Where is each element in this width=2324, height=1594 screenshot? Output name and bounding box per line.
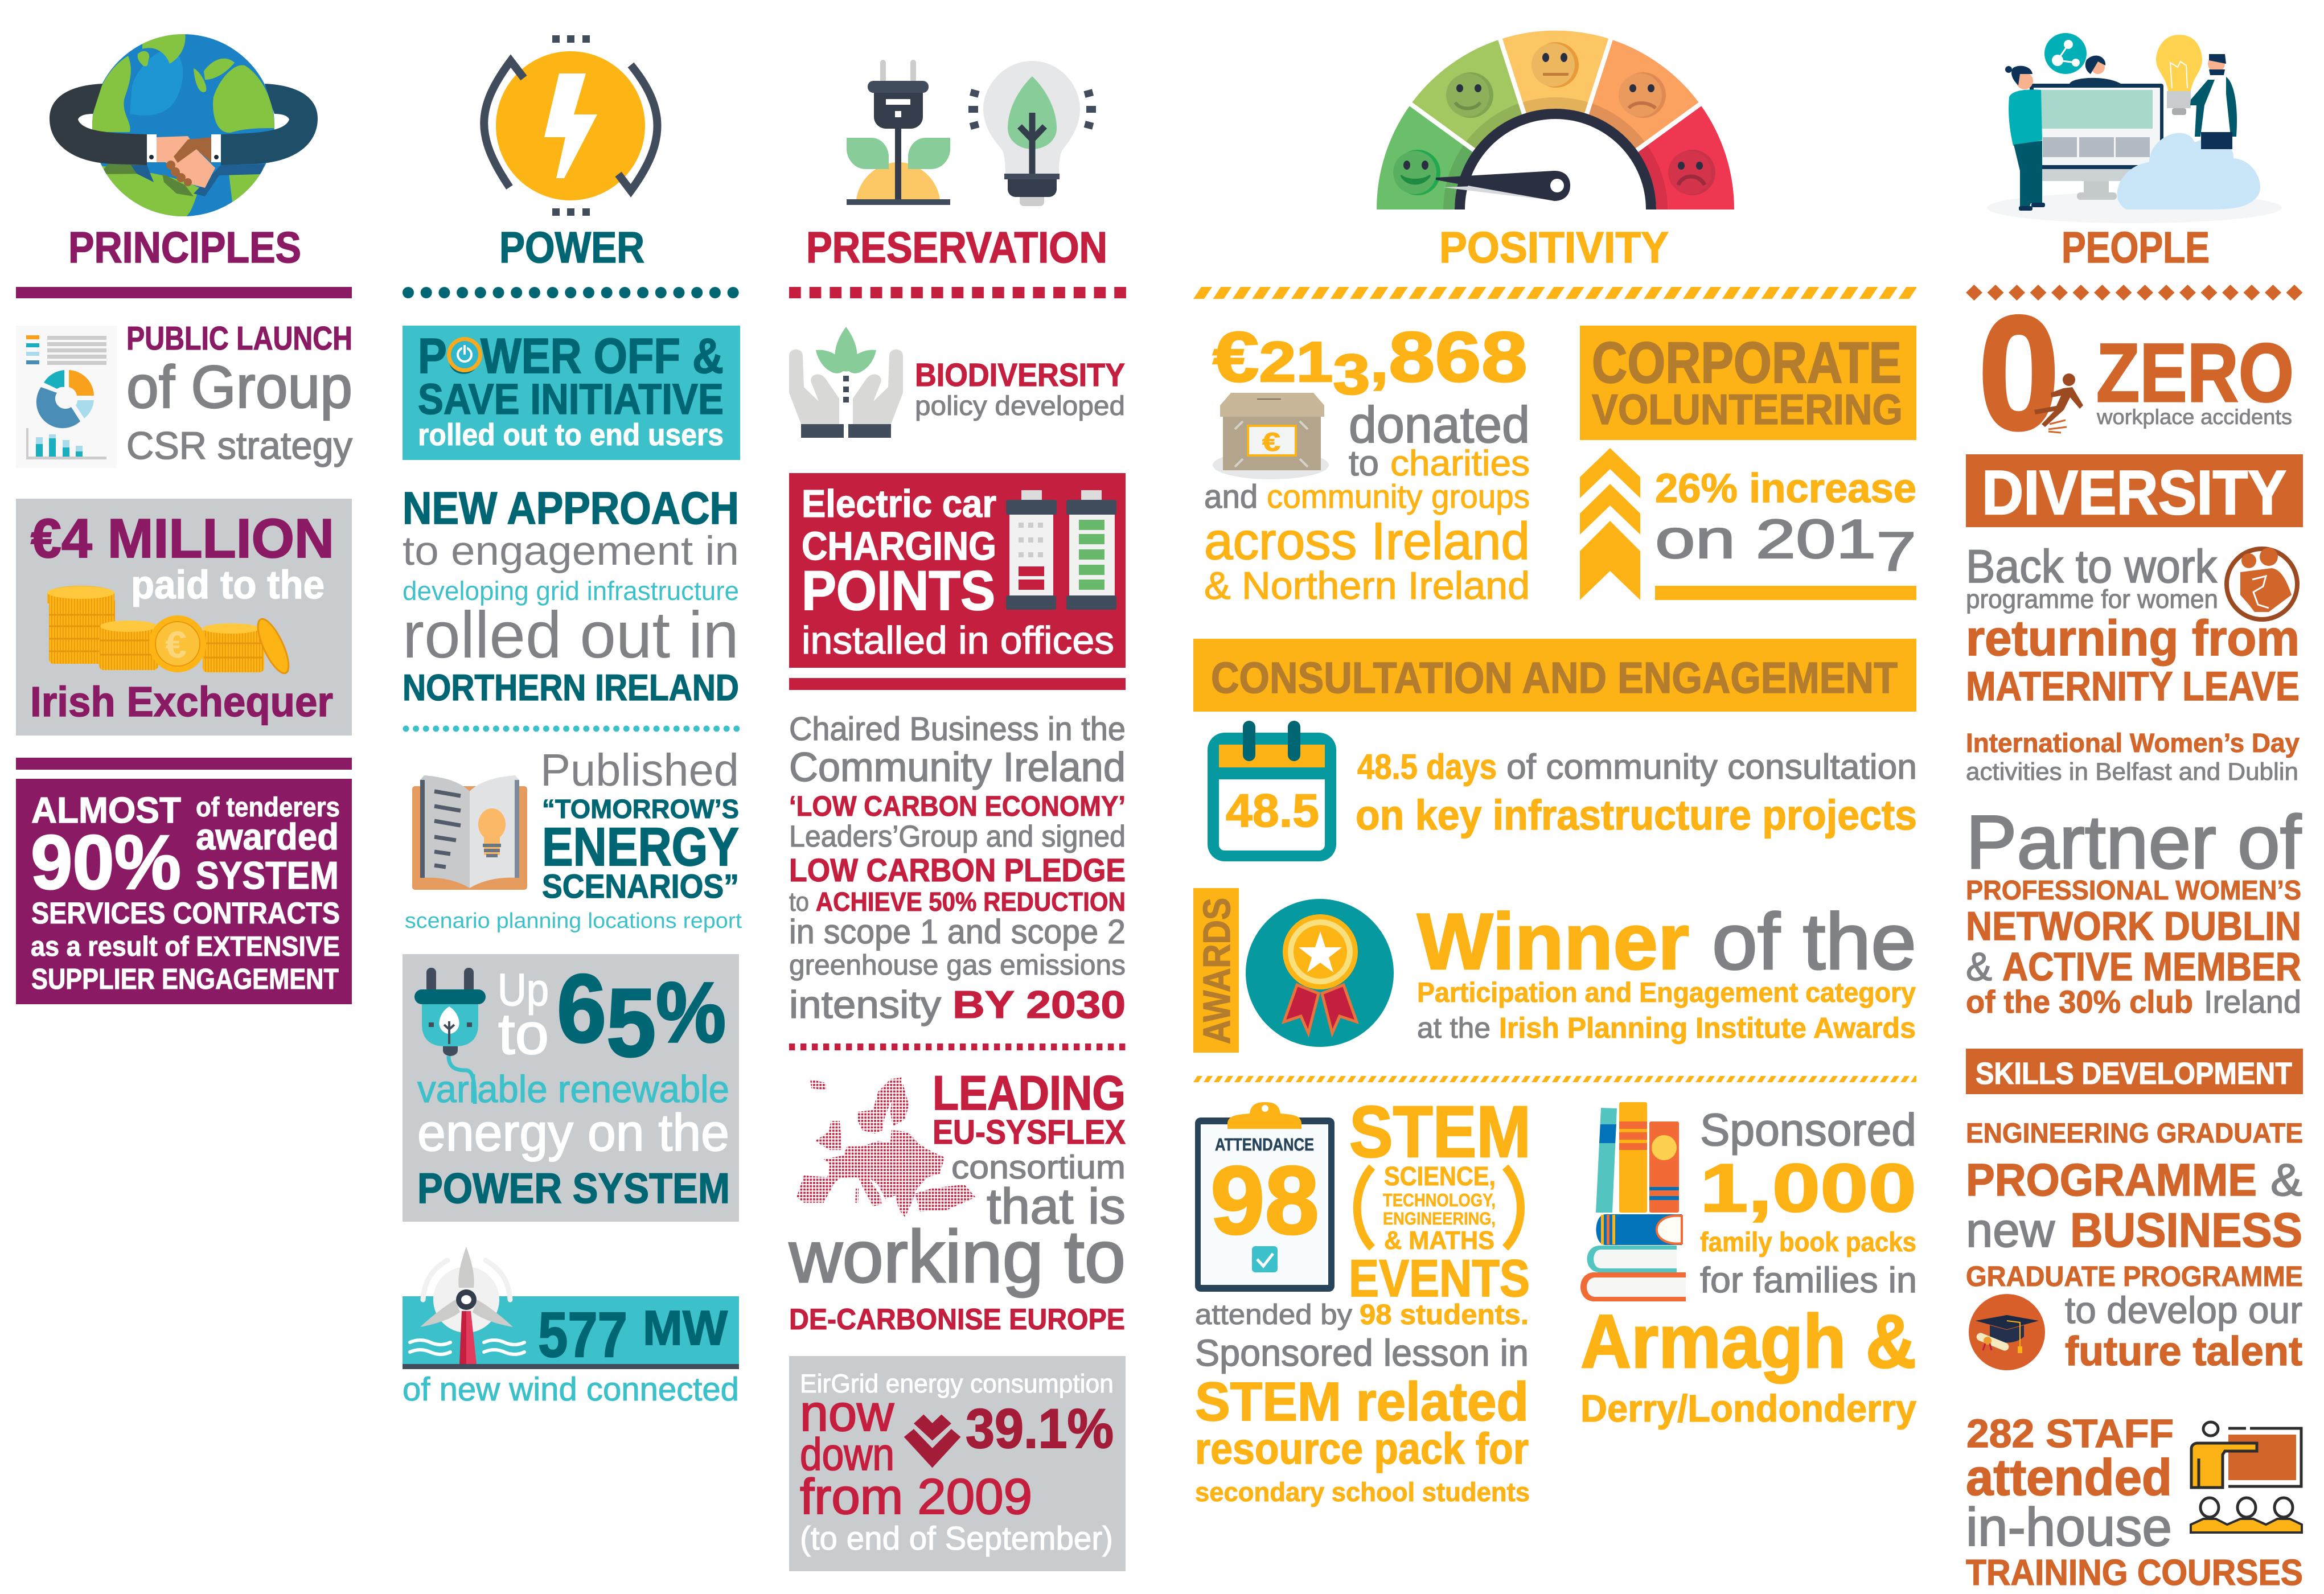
text: returning from maternity leave: returning from — [1966, 610, 2300, 666]
text: new approach to engagement: rolled out in — [403, 598, 739, 672]
text: biodiversity policy: policy developed — [915, 391, 1125, 421]
text: tomorrow's energy scenarios — [405, 745, 742, 933]
text: to develop our future talent — [2065, 1289, 2302, 1374]
text: winner of the: Participation and Engagement category — [1417, 977, 1916, 1008]
text: 26 percent increase — [1655, 466, 1916, 600]
text: attended by 98 students: STEM related — [1195, 1371, 1529, 1432]
text: STEM events: SCIENCE, — [1384, 1161, 1496, 1191]
text: partner of professional women's network: Partner of — [1966, 800, 2302, 885]
text: donation amount: €21 — [1213, 318, 1323, 397]
panel: skills development — [1966, 1049, 2303, 1094]
text: attended by 98 students: resource pack for — [1195, 1424, 1529, 1473]
icon: battery low — [1006, 490, 1057, 610]
text: zero accidents: workplace accidents — [2096, 405, 2292, 429]
text: sponsored book packs: 1,000 — [1700, 1150, 1916, 1226]
text: days of community consultation: 48.5 days — [1357, 747, 1497, 787]
text: variable renewable energy on the power system: variable renewable — [417, 1068, 729, 1111]
text: supplier engagement statistic: as a result of EXTENSIVE — [31, 931, 340, 962]
text: EU-SysFlex consortium: that is — [987, 1178, 1126, 1234]
text: donated to charities — [1204, 397, 1530, 607]
text: energy consumption down: from 2009 — [800, 1468, 1032, 1525]
icon: lightning bolt — [484, 35, 657, 216]
text: energy consumption down: EirGrid energy consumption — [800, 1369, 1114, 1398]
text: attended by 98 students — [1195, 1299, 1530, 1507]
text: international women's day: International Women’s Day — [1966, 728, 2300, 758]
text: STEM events: & MATHS — [1384, 1226, 1494, 1255]
text: donated to charities: charities — [1390, 443, 1530, 483]
text: graduate programmes: PROGRAMME — [1966, 1155, 2257, 1205]
icon: falling person — [2034, 373, 2083, 433]
icon: power button — [447, 337, 482, 372]
text: irish exchequer: Irish Exchequer — [30, 678, 333, 725]
panel: diversity: DIVERSITY — [1982, 458, 2286, 528]
text: returning from maternity leave — [1966, 610, 2300, 709]
text: charging points: installed in offices — [802, 619, 1114, 662]
icon: calendar 48.5: 48.5 — [1226, 785, 1319, 837]
panel: consultation and engagement: CONSULTATION AND ENGAGEMENT — [1211, 654, 1898, 702]
panel: 577 MW new wind — [403, 1247, 739, 1370]
text: public launch: of Group — [126, 354, 352, 421]
panel: power off and save: rolled out to end users — [418, 418, 724, 452]
text: of new wind connected: of new wind connected — [403, 1371, 739, 1408]
text: 282 staff training: 282 STAFF — [1966, 1411, 2174, 1456]
text: variable renewable energy on the power system: energy on the — [417, 1104, 729, 1162]
text: energy consumption down: now — [800, 1385, 894, 1442]
text: back to work programme: Back to work — [1966, 541, 2218, 593]
icon: gauge needle — [1436, 171, 1570, 201]
text: public launch: CSR strategy — [126, 424, 352, 467]
text: 65 percent: 5 — [606, 969, 656, 1077]
text: charging points — [802, 482, 1114, 662]
text: attended by 98 students: Sponsored lesson in — [1195, 1332, 1529, 1374]
icon: open book with light bulb — [412, 775, 527, 890]
text: 282 staff training: in-house — [1966, 1497, 2172, 1558]
text: supplier engagement statistic: 90% — [31, 819, 181, 905]
text: energy consumption down: down — [800, 1429, 894, 1480]
text: up to — [498, 964, 549, 1066]
text: low carbon pledge: Leaders’Group and signed — [789, 820, 1126, 853]
text: winner of the: Winner — [1417, 897, 1689, 986]
text: donated to charities: to — [1349, 443, 1379, 483]
text: low carbon pledge: greenhouse gas emissions — [789, 949, 1126, 981]
text: charging points: CHARGING — [802, 524, 996, 568]
text: sponsored book packs: for families in — [1700, 1260, 1917, 1300]
text: graduate programmes — [1966, 1118, 2303, 1292]
panel: electric car charging points — [789, 473, 1126, 668]
text: winner of the: Irish Planning Institute Awards — [1499, 1012, 1916, 1044]
column: power — [403, 35, 742, 1408]
text: supplier engagement statistic: of tenderers — [196, 792, 340, 823]
text: EU-SysFlex consortium: consortium — [951, 1149, 1126, 1186]
text: winner of the: of the — [1712, 897, 1916, 986]
text: sponsored book packs: Sponsored — [1700, 1104, 1916, 1155]
text: new approach to engagement: to engagement in — [403, 528, 739, 574]
text: variable renewable energy on the power system: POWER SYSTEM — [417, 1164, 730, 1212]
column: people — [1966, 33, 2303, 1593]
icon: wind turbine — [410, 1247, 524, 1364]
text: EU-SysFlex consortium — [789, 1066, 1126, 1336]
icon: coin stacks: € — [165, 623, 187, 665]
panel: consultation and engagement — [1193, 639, 1916, 712]
icon: mother and baby — [2227, 548, 2297, 619]
text: attended by 98 students: 98 students. — [1360, 1299, 1529, 1330]
text: donated to charities: and community groups — [1204, 478, 1530, 515]
icon: angry face — [1668, 150, 1715, 195]
text: 282 staff training: TRAINING COURSES — [1966, 1552, 2303, 1593]
text: sponsored book packs: Derry/Londonderry — [1580, 1387, 1916, 1430]
text: tomorrow's energy scenarios: scenario planning locations report — [405, 909, 742, 933]
text: sponsored book packs: Armagh & — [1580, 1300, 1916, 1384]
text: tomorrow's energy scenarios: SCENARIOS” — [542, 868, 739, 905]
text: energy consumption down — [800, 1369, 1114, 1557]
text: graduate programmes: new — [1966, 1203, 2055, 1258]
text: new approach to engagement — [403, 483, 739, 708]
text: supplier engagement statistic: SYSTEM — [196, 854, 339, 897]
text: low carbon pledge: BY 2030 — [952, 983, 1126, 1026]
text: partner of professional women's network: of the 30% club — [1966, 984, 2193, 1020]
text: partner of professional women's network: Ireland — [2204, 984, 2301, 1020]
text: graduate programmes: BUSINESS — [2070, 1203, 2302, 1258]
text: attended by 98 students: attended by — [1195, 1299, 1352, 1330]
icon: stack of books — [1580, 1102, 1686, 1301]
text: low carbon pledge: Community Ireland — [789, 745, 1126, 790]
text: low carbon pledge: intensity — [789, 983, 941, 1026]
text: low carbon pledge: in scope 1 and scope 2 — [789, 913, 1126, 951]
icon: happy face — [1393, 150, 1440, 195]
text: graduate programmes: GRADUATE PROGRAMME — [1966, 1260, 2303, 1292]
icon: light bulb with leaf — [968, 61, 1096, 206]
icon: hands holding leaves — [789, 327, 903, 438]
icon: plug with seedling — [847, 60, 950, 205]
text: zero accidents — [1978, 283, 2294, 463]
panel: power off and save — [403, 326, 740, 460]
panel: awards: AWARDS — [1196, 898, 1238, 1044]
text: EU-SysFlex consortium: DE-CARBONISE EUROPE — [789, 1303, 1125, 1336]
text: 282 staff training: attended — [1966, 1449, 2172, 1506]
icon: neutral face — [1531, 42, 1579, 88]
text: international women's day — [1966, 728, 2300, 786]
text: energy consumption down: (to end of September) — [800, 1520, 1113, 1557]
text: low carbon pledge: ‘LOW CARBON ECONOMY’ — [789, 790, 1126, 822]
text: EU-SysFlex consortium: working to — [789, 1215, 1126, 1298]
panel: skills development: SKILLS DEVELOPMENT — [1976, 1057, 2292, 1091]
text: to develop our future talent: to develop our — [2065, 1289, 2302, 1331]
text: up to: to — [498, 1001, 549, 1066]
panel: awards — [1193, 888, 1916, 1053]
column: preservation — [789, 60, 1126, 1571]
icon: dotted map of Europe — [796, 1078, 975, 1217]
text: donation amount: 3 — [1333, 343, 1370, 406]
panel: public launch of CSR strategy — [16, 320, 352, 468]
icon: double down chevron — [904, 1415, 960, 1468]
icon: coin stacks — [47, 586, 294, 677]
text: public launch — [126, 320, 352, 467]
icon: donation box — [1213, 393, 1329, 479]
text: to develop our future talent: future talent — [2065, 1329, 2302, 1374]
text: graduate programmes: ENGINEERING GRADUATE — [1966, 1118, 2303, 1149]
text: STEM events: TECHNOLOGY, — [1383, 1190, 1496, 1210]
text: supplier engagement statistic: ALMOST — [31, 790, 181, 831]
text: STEM events: ENGINEERING, — [1383, 1209, 1496, 1229]
text: new approach to engagement: developing grid infrastructure — [403, 576, 739, 606]
text: donated to charities: donated — [1349, 397, 1530, 454]
panel: energy consumption — [789, 1356, 1126, 1571]
icon: attendance clipboard: ATTENDANCE — [1215, 1135, 1314, 1155]
text: 39.1 percent: 39.1% — [966, 1397, 1114, 1460]
heading: power: POWER — [499, 223, 644, 272]
text: low carbon pledge: to ACHIEVE 50% REDUCTION — [789, 886, 1126, 917]
text: charging points: POINTS — [802, 559, 995, 622]
column: principles — [16, 32, 352, 1004]
text: STEM events: EVENTS — [1349, 1250, 1530, 1308]
icon: smiling face — [1446, 72, 1493, 118]
icon: report with charts — [16, 326, 117, 468]
text: tomorrow's energy scenarios: Published — [540, 745, 739, 795]
text: partner of professional women's network — [1966, 800, 2302, 1020]
text: low carbon pledge: LOW CARBON PLEDGE — [789, 852, 1126, 889]
text: supplier engagement statistic: SUPPLIER ENGAGEMENT — [31, 963, 339, 995]
text: back to work programme — [1966, 541, 2218, 614]
icon: donation box: € — [1262, 427, 1280, 457]
panel: power off and save: POWER OFF & — [418, 328, 724, 384]
icon: plug with leaf — [414, 968, 486, 1104]
text: biodiversity policy — [915, 357, 1125, 421]
text: low carbon pledge — [789, 710, 1126, 1026]
text: STEM events — [1349, 1091, 1531, 1308]
text: new approach to engagement: NORTHERN IRELAND — [403, 667, 739, 708]
text: zero accidents: 0 — [1978, 283, 2059, 463]
text: tomorrow's energy scenarios: ENERGY — [542, 817, 739, 877]
text: attended by 98 students: secondary school students — [1195, 1477, 1530, 1507]
icon: medal rosette — [1246, 899, 1394, 1047]
text: back to work programme: programme for women — [1966, 584, 2218, 614]
text: supplier engagement statistic — [31, 790, 340, 995]
text: 26 percent increase: 7 — [1876, 520, 1916, 582]
panel: corporate volunteering: VOLUNTEERING — [1592, 385, 1903, 433]
column: positivity — [1193, 31, 1917, 1507]
text: donated to charities: & Northern Ireland — [1204, 564, 1530, 607]
text: sponsored book packs — [1580, 1104, 1917, 1430]
text: donation amount: , — [1370, 330, 1389, 394]
text: up to: Up — [498, 964, 549, 1015]
panel: up to 65 percent renewable — [403, 954, 739, 1222]
icon: attendance clipboard: 98 — [1210, 1147, 1319, 1255]
text: paid to the: paid to the — [131, 562, 325, 607]
icon: training session — [2191, 1422, 2302, 1533]
text: 65 percent: % — [656, 964, 726, 1060]
text: new approach to engagement: NEW APPROACH — [403, 483, 739, 533]
icon: sad face — [1619, 72, 1666, 118]
text: charging points: Electric car — [802, 482, 996, 525]
heading: positivity: POSITIVITY — [1439, 223, 1669, 272]
text: tomorrow's energy scenarios: “TOMORROW’S — [542, 794, 739, 824]
text: winner of the: at the — [1417, 1012, 1491, 1044]
icon: calendar 48.5 — [1208, 721, 1336, 861]
text: 282 staff training — [1966, 1411, 2303, 1593]
text: partner of professional women's network: PROFESSIONAL WOMEN’S — [1966, 876, 2301, 906]
icon: battery full — [1066, 490, 1116, 610]
icon: attendance clipboard — [1195, 1102, 1335, 1292]
text: days of community consultation — [1356, 747, 1917, 839]
panel: power off and save: SAVE INITIATIVE — [418, 375, 724, 424]
text: 26 percent increase: on 201 — [1655, 508, 1824, 570]
text: EU-SysFlex consortium: EU-SYSFLEX — [933, 1113, 1126, 1151]
text: days of community consultation: on key infrastructure projects — [1356, 791, 1917, 839]
text: 577 MW — [538, 1299, 728, 1370]
text: low carbon pledge: Chaired Business in the — [789, 710, 1126, 747]
text: 577 MW: 577 — [538, 1299, 627, 1370]
heading: people: PEOPLE — [2062, 223, 2210, 272]
panel: almost 90 percent of tenderers — [16, 779, 352, 1004]
text: zero accidents: ZERO — [2096, 326, 2294, 419]
text: graduate programmes: & — [2270, 1155, 2302, 1205]
text: days of community consultation: of community consultation — [1506, 747, 1917, 787]
icon: globe with handshake — [50, 32, 318, 217]
text: donated to charities: across Ireland — [1204, 512, 1530, 570]
panel: corporate volunteering — [1580, 326, 1916, 440]
text: EU-SysFlex consortium: LEADING — [933, 1066, 1126, 1120]
text: donation amount: 868 — [1389, 318, 1508, 397]
icon: graduation cap and diploma — [1969, 1294, 2045, 1370]
chart: sentiment gauge — [1377, 31, 1734, 209]
panel: 4 million paid to the exchequer — [16, 499, 352, 736]
text: international women's day: activities in Belfast and Dublin — [1966, 758, 2298, 786]
icon: team with monitor, cloud and bulb — [1987, 33, 2282, 223]
text: supplier engagement statistic: awarded — [196, 816, 339, 857]
text: STEM events: STEM — [1349, 1091, 1531, 1173]
text: 4 million: €4 MILLION — [31, 507, 334, 569]
text: variable renewable energy on the power system — [417, 1068, 730, 1212]
heading: preservation: PRESERVATION — [806, 223, 1107, 272]
text: 26 percent increase: 26% increase — [1655, 466, 1916, 511]
text: partner of professional women's network: & — [1966, 944, 1992, 989]
text: supplier engagement statistic: SERVICES CONTRACTS — [31, 897, 340, 930]
text: winner of the — [1417, 897, 1916, 1044]
text: 577 MW: MW — [643, 1301, 728, 1355]
heading: principles: PRINCIPLES — [68, 223, 301, 272]
text: biodiversity policy: BIODIVERSITY — [915, 357, 1125, 393]
text: public launch: PUBLIC LAUNCH — [126, 320, 352, 357]
panel: corporate volunteering: CORPORATE — [1592, 330, 1902, 395]
icon: up chevrons — [1580, 448, 1640, 600]
text: sponsored book packs: family book packs — [1700, 1227, 1916, 1258]
text: 65 percent: 6 — [557, 955, 611, 1063]
